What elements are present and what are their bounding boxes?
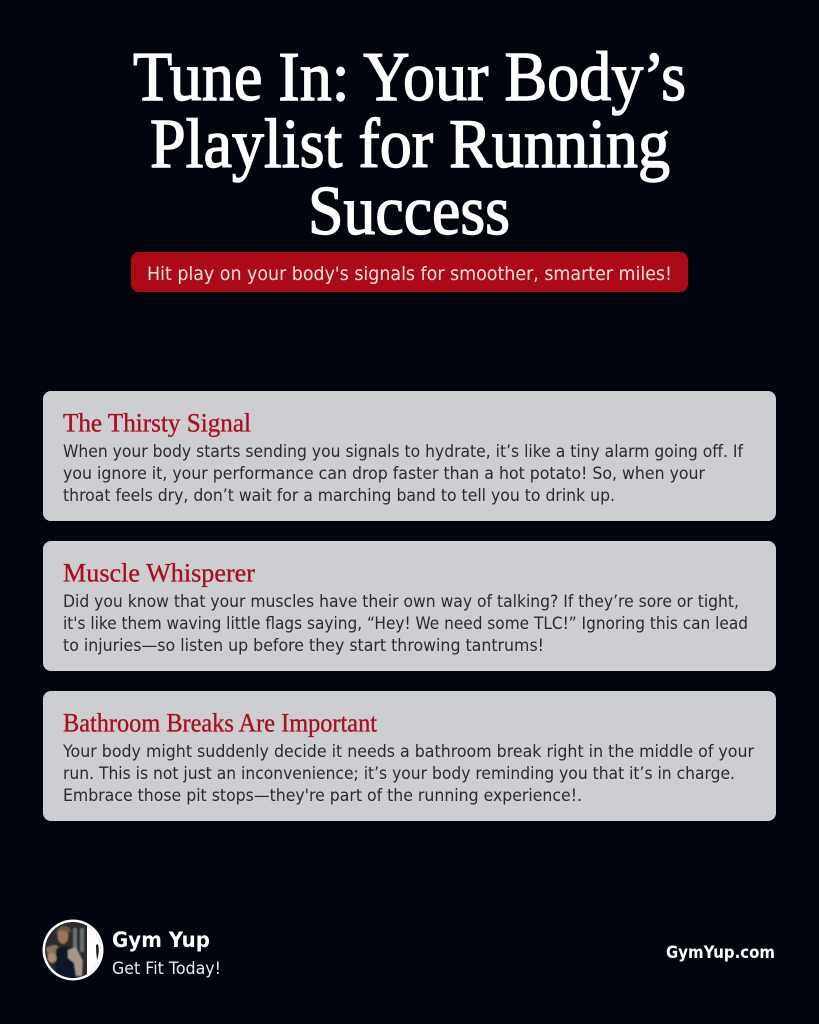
body text: bathroom breaks: Embrace those pit stops—they're part of the running experience!. [63, 786, 582, 806]
heading: bathroom breaks: Bathroom Breaks Are Important [63, 708, 378, 738]
title: Success [308, 173, 510, 250]
panel: the thirsty signal [43, 391, 776, 521]
brand name: Gym Yup [112, 928, 210, 953]
body text: bathroom breaks: Your body might suddenly decide it needs a bathroom break right in the middle of your [62, 742, 754, 762]
subtitle banner [131, 252, 688, 292]
body text: bathroom breaks: run. This is not just an inconvenience; it’s your body reminding you that it’s in charge. [63, 764, 735, 784]
subtitle banner: Hit play on your body's signals for smoother, smarter miles! [147, 264, 672, 285]
title: Playlist for Running [150, 106, 670, 183]
body text: bathroom breaks [62, 742, 754, 806]
title: Tune In: Your Body’s [133, 39, 686, 116]
panel: bathroom breaks [43, 691, 776, 821]
body text: the thirsty signal: throat feels dry, don’t wait for a marching band to tell you to drink up. [63, 486, 615, 506]
body text: the thirsty signal: you ignore it, your performance can drop faster than a hot potato! So, when your [63, 464, 705, 484]
icon: profile avatar [42, 920, 104, 980]
body text: muscle whisperer [63, 592, 748, 656]
body text: the thirsty signal: When your body starts sending you signals to hydrate, it’s like a tiny alarm going off. If [63, 442, 744, 462]
heading: muscle whisperer: Muscle Whisperer [63, 558, 255, 588]
panel: muscle whisperer [43, 541, 776, 671]
body text: the thirsty signal [63, 442, 744, 506]
body text: muscle whisperer: it's like them waving little flags saying, “Hey! We need some TLC!” Ignoring this can lead [63, 614, 748, 634]
tagline: Get Fit Today! [112, 958, 221, 978]
body text: muscle whisperer: to injuries—so listen up before they start throwing tantrums! [63, 636, 544, 656]
title [133, 39, 686, 250]
heading: the thirsty signal: The Thirsty Signal [63, 408, 251, 438]
website: GymYup.com [666, 942, 775, 962]
body text: muscle whisperer: Did you know that your muscles have their own way of talking? If they’re sore or tight, [63, 592, 739, 612]
